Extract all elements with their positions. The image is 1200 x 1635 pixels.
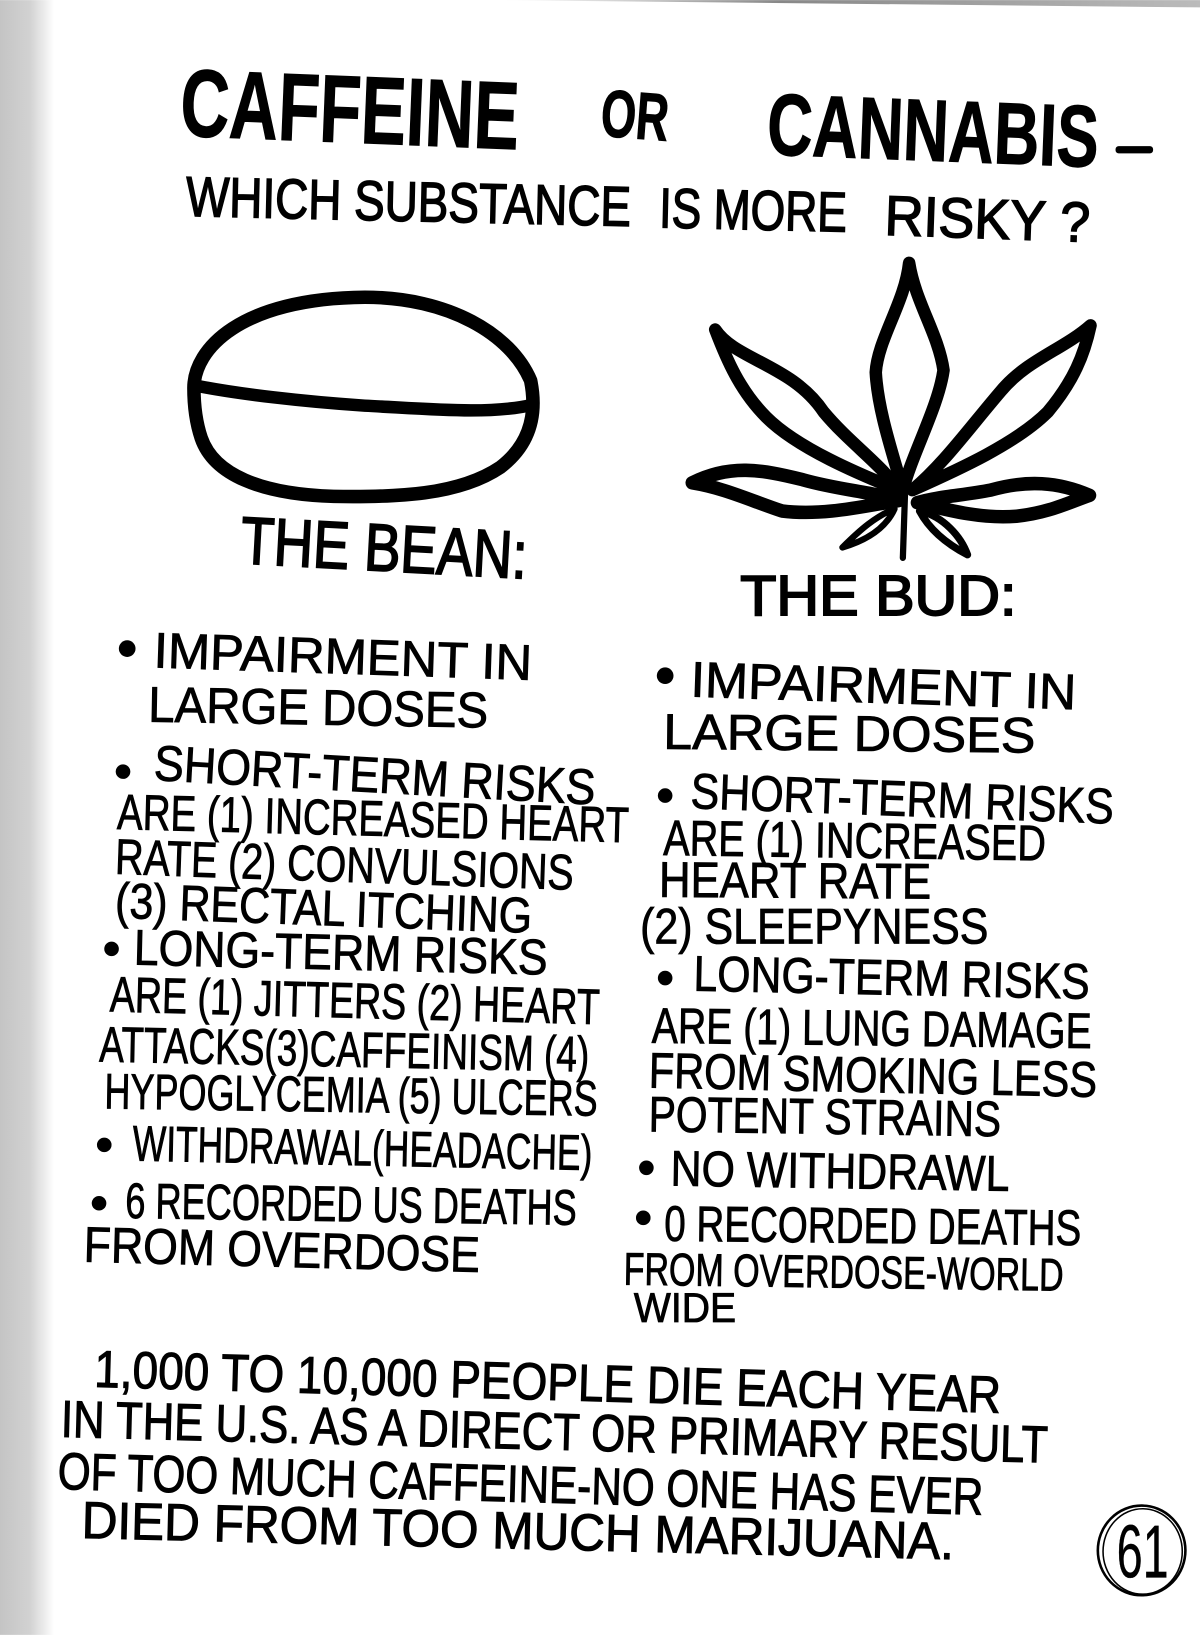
bullet: impairment: IMPAIRMENT IN bbox=[690, 652, 1077, 720]
leaf upper left bbox=[715, 330, 899, 490]
subtitle: WHICH SUBSTANCE bbox=[185, 165, 632, 238]
icon: cannabis leaf bbox=[692, 263, 1091, 558]
bullet: short-term risks: (3) RECTAL ITCHING bbox=[114, 873, 533, 944]
subtitle: IS MORE bbox=[659, 176, 848, 244]
bullet: short-term risks: SHORT-TERM RISKS bbox=[153, 735, 597, 816]
text block: closing statement: OF TOO MUCH CAFFEINE-NO ONE HAS EVER bbox=[57, 1443, 984, 1527]
panel: bud risks list bbox=[623, 652, 1115, 1331]
bullet: short-term risks: SHORT-TERM RISKS bbox=[690, 763, 1115, 835]
bullet: recorded deaths: FROM OVERDOSE-WORLD bbox=[623, 1243, 1064, 1301]
leaf lower right bbox=[917, 484, 1089, 517]
bullet: long-term risks: LONG-TERM RISKS bbox=[693, 946, 1090, 1010]
title bbox=[178, 50, 1153, 186]
bullet: impairment bbox=[119, 622, 533, 739]
text block: closing statement: 1,000 TO 10,000 PEOPLE DIE EACH YEAR bbox=[93, 1341, 1002, 1425]
bullet: impairment: LARGE DOSES bbox=[663, 704, 1036, 764]
bullet: impairment: LARGE DOSES bbox=[148, 677, 489, 739]
icon: coffee bean bbox=[194, 297, 533, 497]
bullet: short-term risks: RATE (2) CONVULSIONS bbox=[114, 829, 575, 901]
bullet: recorded deaths: WIDE bbox=[634, 1284, 736, 1331]
bullet: short-term risks: (2) SLEEPYNESS bbox=[640, 899, 988, 955]
text block: closing statement bbox=[57, 1341, 1049, 1571]
page number badge: 61 bbox=[1117, 1510, 1169, 1594]
bullet: long-term risks bbox=[648, 946, 1098, 1147]
bullet: short-term risks: HEART RATE bbox=[659, 852, 931, 910]
bullet: long-term risks bbox=[99, 920, 600, 1127]
text block: closing statement: DIED FROM TOO MUCH MARIJUANA. bbox=[81, 1492, 955, 1571]
small leaves and stem bbox=[842, 509, 895, 547]
bullet: impairment bbox=[657, 652, 1077, 764]
bullet: short-term risks: ARE (1) INCREASED bbox=[663, 810, 1046, 871]
bullet: recorded deaths bbox=[623, 1196, 1082, 1331]
bullet: long-term risks: LONG-TERM RISKS bbox=[133, 920, 548, 986]
bullet: long-term risks: FROM SMOKING LESS bbox=[648, 1043, 1098, 1108]
bullet: short-term risks bbox=[114, 735, 630, 944]
bullet: long-term risks: ATTACKS(3)CAFFEINISM (4) bbox=[99, 1016, 590, 1083]
bullet: long-term risks: ARE (1) LUNG DAMAGE bbox=[651, 998, 1092, 1059]
bullet: short-term risks bbox=[640, 763, 1115, 955]
title word: caffeine: CAFFEINE bbox=[178, 50, 521, 170]
bullet: withdrawal: WITHDRAWAL(HEADACHE) bbox=[132, 1116, 593, 1181]
bullet: long-term risks: ARE (1) JITTERS (2) HEART bbox=[109, 966, 600, 1035]
bullet: recorded deaths: 0 RECORDED DEATHS bbox=[664, 1196, 1082, 1256]
heading: the bean: THE BEAN: bbox=[239, 504, 529, 594]
bullet: recorded deaths: FROM OVERDOSE bbox=[83, 1217, 481, 1283]
bullet: long-term risks: POTENT STRAINS bbox=[648, 1086, 1001, 1147]
leaf top bbox=[876, 263, 944, 490]
subtitle: RISKY ? bbox=[884, 184, 1091, 254]
bullet: no withdrawal: NO WITHDRAWL bbox=[670, 1141, 1010, 1202]
heading: the bud: THE BUD: bbox=[740, 564, 1017, 627]
leaf lower left bbox=[692, 470, 899, 512]
title word: or: OR bbox=[598, 77, 672, 156]
bullet: recorded deaths bbox=[83, 1173, 577, 1283]
title dash bbox=[1116, 146, 1153, 153]
bullet: long-term risks: HYPOGLYCEMIA (5) ULCERS bbox=[104, 1063, 598, 1127]
bullet: impairment: IMPAIRMENT IN bbox=[153, 622, 533, 691]
subtitle bbox=[185, 165, 1091, 254]
panel: bean risks list bbox=[83, 622, 630, 1283]
page number badge bbox=[1098, 1506, 1185, 1595]
bullet: withdrawal bbox=[97, 1116, 593, 1181]
leaf upper right bbox=[912, 325, 1091, 490]
bullet: recorded deaths: 6 RECORDED US DEATHS bbox=[125, 1173, 577, 1236]
bullet: short-term risks: ARE (1) INCREASED HEART bbox=[116, 784, 630, 853]
